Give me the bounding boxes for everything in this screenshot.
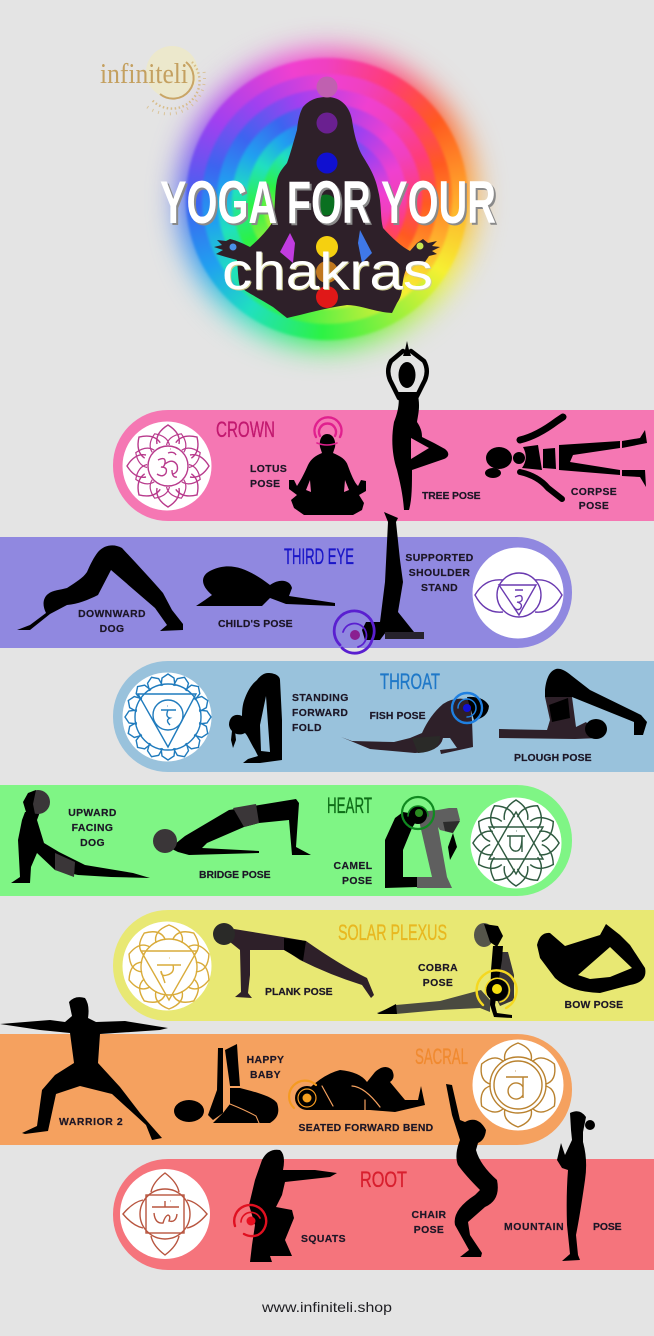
label: upward facing dog	[68, 808, 117, 849]
label: camel pose: POSE	[342, 876, 372, 887]
label: corpse pose: CORPSE	[571, 487, 617, 498]
panel: solar plexus	[113, 910, 654, 1021]
figure: lotus pose	[289, 417, 366, 515]
label: bow pose: BOW POSE	[564, 1000, 624, 1011]
label: warrior 2: WARRIOR 2	[59, 1117, 123, 1128]
icon: solar plexus mandala	[122, 922, 213, 1010]
label: supported shoulder stand: SUPPORTED	[405, 553, 474, 564]
label: child's pose: CHILD'S POSE	[218, 619, 293, 630]
label: happy baby	[247, 1055, 284, 1081]
seated meditation silhouette with chakra dots	[214, 76, 440, 318]
icon: crown mandala	[122, 422, 212, 510]
root chakra rings	[234, 1205, 266, 1236]
logo: infiniteli: infiniteli	[100, 59, 188, 90]
panel: third eye	[0, 512, 572, 653]
figure: warrior 2	[0, 997, 168, 1140]
label: lotus pose: LOTUS	[250, 464, 287, 475]
label: plough pose: PLOUGH POSE	[514, 753, 592, 764]
figure: tree pose	[388, 341, 448, 510]
figure: child's pose	[196, 566, 335, 606]
figure: supported shoulder stand	[334, 512, 424, 653]
label: tree pose: TREE POSE	[422, 491, 481, 502]
logo: infiniteli	[100, 46, 204, 114]
title	[160, 169, 496, 301]
label: happy baby: HAPPY	[247, 1055, 284, 1066]
label: plank pose: PLANK POSE	[265, 987, 333, 998]
figure: bridge pose	[153, 799, 311, 855]
label: downward dog: DOWNWARD	[78, 609, 146, 620]
figure: upward facing dog	[11, 790, 150, 883]
label: supported shoulder stand: SHOULDER	[409, 568, 470, 579]
heading: heart: HEART	[327, 793, 372, 818]
label: squats: SQUATS	[301, 1234, 346, 1245]
label: seated forward bend: SEATED FORWARD BEND	[298, 1123, 434, 1134]
label: supported shoulder stand	[405, 553, 474, 594]
label: fish pose: FISH POSE	[370, 711, 426, 722]
label: upward facing dog: FACING	[72, 823, 113, 834]
icon: root mandala	[120, 1169, 210, 1259]
figure: seated forward bend	[289, 1067, 425, 1112]
icon: sacral mandala	[472, 1040, 564, 1130]
third eye chakra rings	[334, 611, 374, 653]
rainbow circle background	[156, 28, 498, 370]
figure: squats	[234, 1150, 337, 1262]
figure: corpse pose	[485, 417, 647, 499]
label: chair pose: CHAIR	[412, 1210, 447, 1221]
label: corpse pose	[571, 487, 617, 512]
figure: downward dog	[17, 545, 183, 631]
icon: third eye mandala	[472, 548, 564, 638]
figure: standing forward fold	[229, 673, 282, 763]
figure: mountain pose	[557, 1111, 595, 1261]
label: cobra pose	[418, 963, 458, 989]
heading: third eye: THIRD EYE	[284, 544, 354, 569]
label: camel pose	[334, 861, 373, 887]
label: mountain pose: MOUNTAIN	[504, 1222, 564, 1233]
throat chakra rings	[452, 693, 482, 723]
label: standing forward fold: STANDING	[292, 693, 349, 704]
figure: chair pose	[446, 1084, 498, 1257]
figure: fish pose	[341, 693, 489, 754]
label: standing forward fold: FOLD	[292, 723, 322, 734]
label: chair pose	[412, 1210, 447, 1236]
figure: camel pose	[385, 797, 460, 888]
label: bridge pose: BRIDGE POSE	[199, 870, 271, 881]
label: cobra pose: POSE	[423, 978, 453, 989]
crown chakra rings	[314, 417, 342, 445]
label: chair pose: POSE	[414, 1225, 444, 1236]
label: upward facing dog: DOG	[80, 838, 105, 849]
label: mountain pose: POSE	[593, 1222, 622, 1233]
panel: root	[113, 1084, 654, 1270]
label: supported shoulder stand: STAND	[421, 583, 458, 594]
heading: crown: CROWN	[216, 417, 275, 442]
figure: plough pose	[499, 669, 647, 739]
panel: heart	[0, 785, 572, 896]
panel: crown	[113, 341, 654, 521]
label: standing forward fold: FORWARD	[292, 708, 348, 719]
panel: sacral	[0, 997, 572, 1145]
label: upward facing dog: UPWARD	[68, 808, 117, 819]
heading: root: ROOT	[360, 1167, 407, 1192]
label: standing forward fold	[292, 693, 349, 734]
label: mountain pose	[504, 1222, 622, 1233]
heading: throat: THROAT	[380, 669, 440, 694]
figure: cobra pose	[377, 923, 517, 1018]
solar plexus chakra rings	[477, 970, 517, 1008]
label: downward dog	[78, 609, 146, 635]
label: happy baby: BABY	[250, 1070, 281, 1081]
heading: solar plexus: SOLAR PLEXUS	[338, 920, 447, 945]
label: corpse pose: POSE	[579, 501, 609, 512]
heart chakra rings	[402, 797, 434, 829]
figure: plank pose	[213, 923, 374, 998]
icon: throat mandala	[122, 672, 212, 762]
label: lotus pose: POSE	[250, 479, 280, 490]
figure: happy baby	[174, 1044, 278, 1123]
icon: heart mandala	[470, 798, 562, 888]
label: camel pose: CAMEL	[334, 861, 373, 872]
figure: bow pose	[537, 924, 645, 993]
label: downward dog: DOG	[100, 624, 124, 635]
label: lotus pose	[250, 464, 287, 490]
website url: www.infiniteli.shop	[261, 1299, 392, 1315]
sacral chakra rings	[289, 1081, 316, 1108]
title: chakras	[222, 243, 433, 301]
panel: throat	[113, 661, 654, 772]
title: YOGA FOR YOUR	[160, 169, 496, 236]
label: cobra pose: COBRA	[418, 963, 458, 974]
heading: sacral: SACRAL	[415, 1044, 468, 1069]
